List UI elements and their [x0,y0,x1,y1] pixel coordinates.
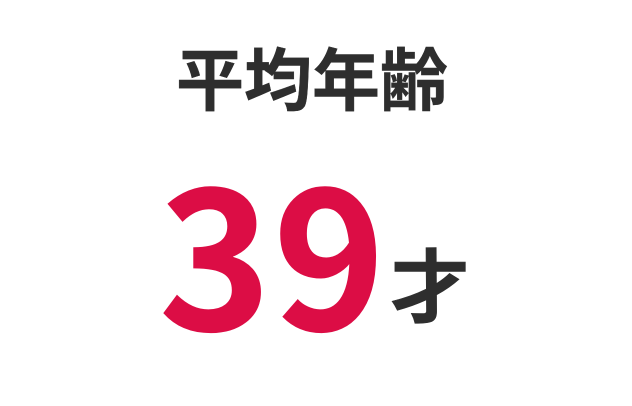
value: 39: 39 [159,110,387,385]
title: 平均年齢 [176,26,448,125]
unit: 才 [390,224,470,340]
